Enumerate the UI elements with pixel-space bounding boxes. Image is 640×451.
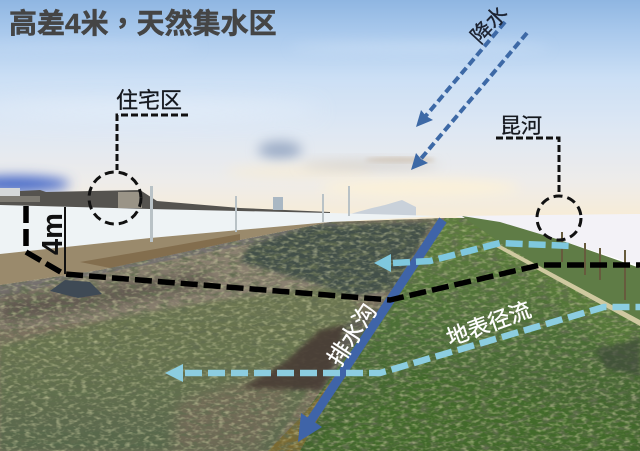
surface runoff arrow lower xyxy=(165,307,640,382)
title: 高差4米，天然集水区 xyxy=(9,2,277,42)
ground xyxy=(0,215,640,451)
label: 4m height xyxy=(37,207,69,274)
label: residential area with leader xyxy=(89,88,188,224)
white wall xyxy=(0,205,440,254)
terrain section dashed line xyxy=(26,206,640,300)
surface runoff arrow upper xyxy=(374,243,572,272)
label: rainfall: 降水 xyxy=(467,2,512,48)
river surface xyxy=(455,214,640,266)
label: river with leader xyxy=(496,115,581,240)
distant buildings xyxy=(0,188,416,218)
label: drainage ditch: 排水沟 xyxy=(322,299,382,371)
label: river with leader: 昆河 xyxy=(500,115,542,138)
label: 4m height: 4m xyxy=(37,213,69,255)
drainage ditch arrow xyxy=(298,220,443,442)
label: residential area with leader: 住宅区 xyxy=(116,88,182,113)
label: surface runoff: 地表径流 xyxy=(443,297,534,351)
background: sky xyxy=(0,0,640,222)
rainfall arrows xyxy=(411,22,527,170)
bank and tree strip on far side xyxy=(0,186,640,326)
